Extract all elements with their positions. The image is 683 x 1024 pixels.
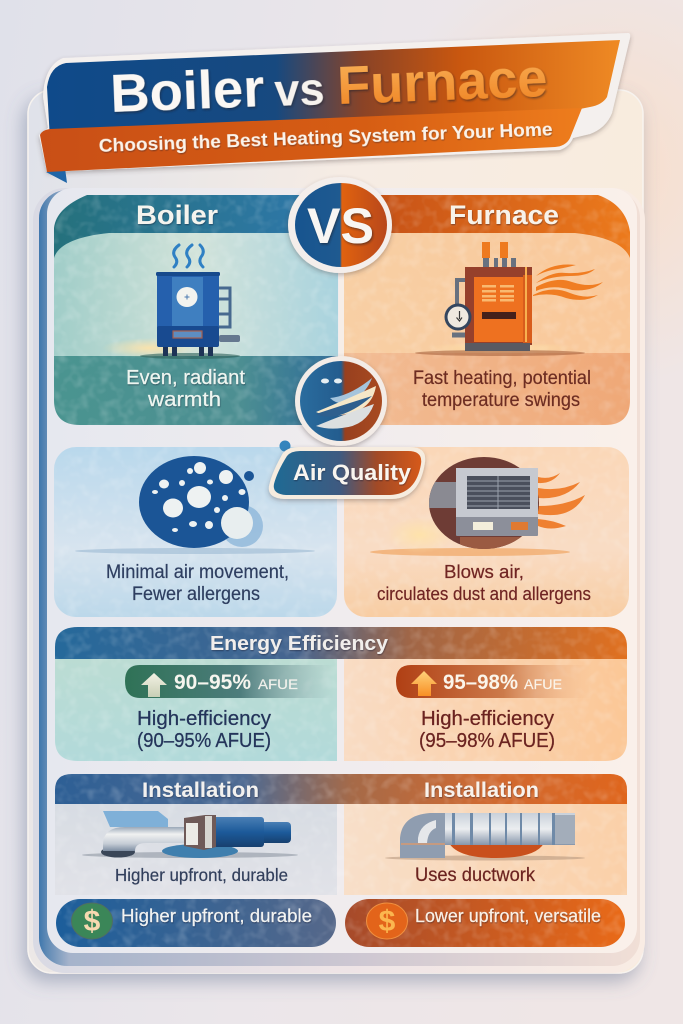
subtitle: Choosing the Best Heating System for Your Home bbox=[98, 118, 553, 156]
floor shadow bbox=[140, 353, 240, 359]
panel ground: furnace bbox=[344, 353, 630, 425]
icon: furnace bbox=[415, 242, 603, 356]
chimney collars bbox=[483, 258, 516, 267]
title: Furnace: Furnace bbox=[336, 48, 548, 116]
divider line bbox=[339, 268, 344, 360]
text: furnace efficiency bbox=[419, 708, 555, 752]
energy boiler body bbox=[55, 659, 337, 761]
icon: dollar orange bbox=[366, 903, 408, 939]
badge fill bbox=[295, 183, 387, 267]
cost pill: furnace bbox=[345, 899, 625, 947]
back card bbox=[28, 90, 643, 973]
energy header band bbox=[55, 627, 627, 659]
air waves bbox=[316, 378, 376, 429]
icon: allergen particles bbox=[75, 440, 315, 554]
text: furnace install: Uses ductwork bbox=[415, 865, 535, 886]
duct sections bbox=[441, 813, 575, 845]
collar highlight bbox=[186, 823, 198, 845]
arrow bbox=[141, 673, 167, 697]
duct ribs bbox=[452, 813, 555, 845]
panel: heating comfort furnace bbox=[344, 195, 630, 425]
main frame bbox=[33, 188, 645, 973]
elbow foot bbox=[101, 846, 135, 858]
unit body bbox=[456, 468, 538, 536]
panel: heating comfort boiler bbox=[54, 195, 338, 425]
base bbox=[465, 343, 530, 351]
header: furnace band bbox=[344, 195, 630, 258]
installation header band bbox=[55, 774, 627, 804]
text: furnace air bbox=[377, 561, 591, 604]
gauge needle bbox=[456, 311, 462, 321]
text: boiler efficiency bbox=[137, 708, 271, 752]
text: boiler comfort: warmth bbox=[147, 389, 221, 411]
heading: installation boiler: Installation bbox=[142, 779, 259, 802]
grill lines bbox=[467, 476, 530, 509]
white control bbox=[473, 522, 493, 530]
panel: air quality furnace bbox=[344, 447, 629, 617]
mottled texture bbox=[40, 190, 640, 960]
side cabinet bbox=[429, 482, 456, 508]
ground shadow bbox=[385, 856, 585, 860]
side dot bbox=[244, 471, 254, 481]
body side dark bbox=[465, 267, 532, 345]
panel: energy efficiency bbox=[55, 627, 627, 761]
lower pipe bbox=[452, 332, 470, 338]
dial mark bbox=[184, 294, 190, 300]
sphere backdrop bbox=[429, 457, 539, 549]
floor glow bbox=[370, 548, 570, 556]
handle pipe bbox=[219, 288, 230, 327]
text: furnace comfort: temperature swings bbox=[422, 390, 580, 411]
flames bbox=[538, 473, 585, 528]
panel: installation bbox=[55, 774, 627, 895]
unit: AFUE bbox=[524, 676, 562, 692]
body bbox=[157, 272, 219, 347]
text: furnace air: Blows air, bbox=[444, 561, 524, 582]
slot bbox=[173, 331, 202, 338]
text: boiler air: Fewer allergens bbox=[132, 584, 260, 605]
red base bbox=[449, 843, 544, 858]
heading: Boiler: Boiler bbox=[136, 200, 219, 230]
right side bbox=[523, 275, 532, 343]
title banner bbox=[39, 33, 630, 183]
floor glow bbox=[75, 548, 315, 554]
floor shadow bbox=[415, 350, 585, 356]
panel: air quality boiler bbox=[54, 447, 337, 617]
panel body: furnace upper bbox=[344, 233, 630, 356]
floor glow bbox=[425, 342, 575, 354]
icon: dollar green bbox=[72, 903, 112, 939]
text: furnace efficiency: High-efficiency bbox=[421, 708, 554, 730]
outlet pipe bbox=[219, 335, 240, 342]
title: Boiler: Boiler bbox=[109, 58, 265, 124]
end section bbox=[555, 815, 575, 844]
installation furnace body bbox=[344, 804, 627, 895]
frame band bbox=[39, 190, 640, 966]
collar bbox=[184, 815, 216, 850]
grill bbox=[467, 476, 530, 509]
slot bbox=[482, 312, 516, 319]
elbow pipe bbox=[103, 827, 190, 851]
efficiency badge: boiler bbox=[125, 665, 334, 698]
pill fill bbox=[274, 451, 421, 495]
light blue block bbox=[103, 811, 168, 827]
text: furnace comfort: Fast heating, potential bbox=[413, 368, 591, 389]
text: boiler install: Higher upfront, durable bbox=[115, 865, 288, 885]
banner white border bbox=[39, 33, 630, 172]
icon: ductwork bbox=[385, 813, 585, 860]
title: vs: vs bbox=[273, 63, 325, 116]
label: Air Quality bbox=[293, 460, 412, 485]
blob bbox=[139, 456, 249, 548]
dial bbox=[176, 287, 198, 307]
large bubble back bbox=[221, 505, 263, 547]
header: boiler band bbox=[54, 195, 338, 258]
base bricks bbox=[460, 537, 521, 549]
icon: dollar green: $ bbox=[84, 905, 101, 938]
panel ground: boiler bbox=[54, 356, 338, 425]
badge background bbox=[125, 665, 334, 698]
blue puddle bbox=[162, 844, 238, 858]
VS: VS bbox=[307, 198, 374, 254]
VS badge bbox=[288, 177, 392, 273]
text: furnace air: circulates dust and allergens bbox=[377, 583, 591, 604]
banner blue to orange fill bbox=[47, 40, 620, 140]
main cylinder bbox=[210, 817, 264, 847]
efficiency badge: furnace bbox=[396, 665, 591, 698]
icon: boiler pipe bbox=[82, 811, 298, 858]
text: boiler efficiency: (90–95% AFUE) bbox=[137, 730, 271, 752]
elbow band bbox=[401, 843, 445, 845]
text: boiler efficiency: High-efficiency bbox=[137, 708, 271, 730]
particles bbox=[152, 462, 246, 532]
warm background glow bbox=[380, 0, 683, 390]
top accent dot bbox=[280, 440, 290, 452]
steam bbox=[174, 245, 203, 267]
floor glow bbox=[102, 338, 198, 358]
elbow bbox=[400, 813, 445, 858]
heat waves bbox=[533, 264, 603, 300]
frame inner bbox=[47, 188, 637, 953]
legs bbox=[163, 345, 213, 356]
badge ring bbox=[288, 177, 392, 273]
orange control bbox=[511, 522, 528, 530]
heading: Furnace: Furnace bbox=[449, 200, 559, 230]
ribbon fold bbox=[46, 168, 67, 183]
energy furnace body bbox=[344, 659, 627, 761]
ribbon band bbox=[40, 108, 582, 172]
text: boiler air bbox=[106, 562, 289, 605]
side pipe bbox=[457, 280, 470, 306]
unit upper bbox=[456, 468, 538, 517]
text: furnace efficiency: (95–98% AFUE) bbox=[419, 730, 555, 752]
lower band bbox=[157, 326, 219, 347]
unit: AFUE bbox=[258, 676, 298, 692]
frame outer edge bbox=[33, 188, 645, 973]
badge fill bbox=[300, 361, 382, 441]
pill border bbox=[269, 447, 425, 499]
text: boiler comfort bbox=[126, 367, 245, 411]
cost text: furnace: Lower upfront, versatile bbox=[415, 905, 601, 926]
light stripe bbox=[525, 267, 527, 342]
heading: energy efficiency: Energy Efficiency bbox=[210, 633, 389, 655]
installation boiler body bbox=[55, 804, 337, 895]
ember glow bbox=[386, 517, 454, 553]
ground shadow bbox=[82, 852, 298, 858]
narrow cylinder bbox=[260, 822, 291, 843]
text: furnace comfort bbox=[413, 368, 591, 411]
icon: boiler bbox=[102, 245, 240, 359]
front panel bbox=[172, 277, 203, 326]
badge background bbox=[396, 665, 591, 698]
top lid bbox=[156, 272, 220, 276]
cost pill: boiler bbox=[56, 899, 336, 947]
text: boiler air: Minimal air movement, bbox=[106, 562, 289, 583]
air dots bbox=[321, 378, 329, 384]
large bubble bbox=[221, 507, 253, 539]
value: 95–98% bbox=[443, 671, 518, 694]
panel body: boiler upper bbox=[54, 233, 338, 356]
air quality label bbox=[269, 447, 425, 499]
text: boiler comfort: Even, radiant bbox=[126, 367, 245, 389]
arrow bbox=[411, 671, 437, 696]
cost text: boiler: Higher upfront, durable bbox=[121, 905, 312, 926]
heading: installation furnace: Installation bbox=[424, 779, 539, 802]
air flow badge bbox=[295, 356, 387, 446]
gauge bbox=[444, 304, 472, 330]
elbow highlight bbox=[418, 820, 436, 843]
value: 90–95% bbox=[174, 671, 251, 694]
front bbox=[474, 277, 523, 342]
chimneys bbox=[482, 242, 490, 258]
badge ring bbox=[295, 356, 387, 446]
icon: dollar orange: $ bbox=[379, 905, 396, 938]
vents bbox=[482, 285, 514, 302]
icon: air handler bbox=[370, 457, 585, 556]
